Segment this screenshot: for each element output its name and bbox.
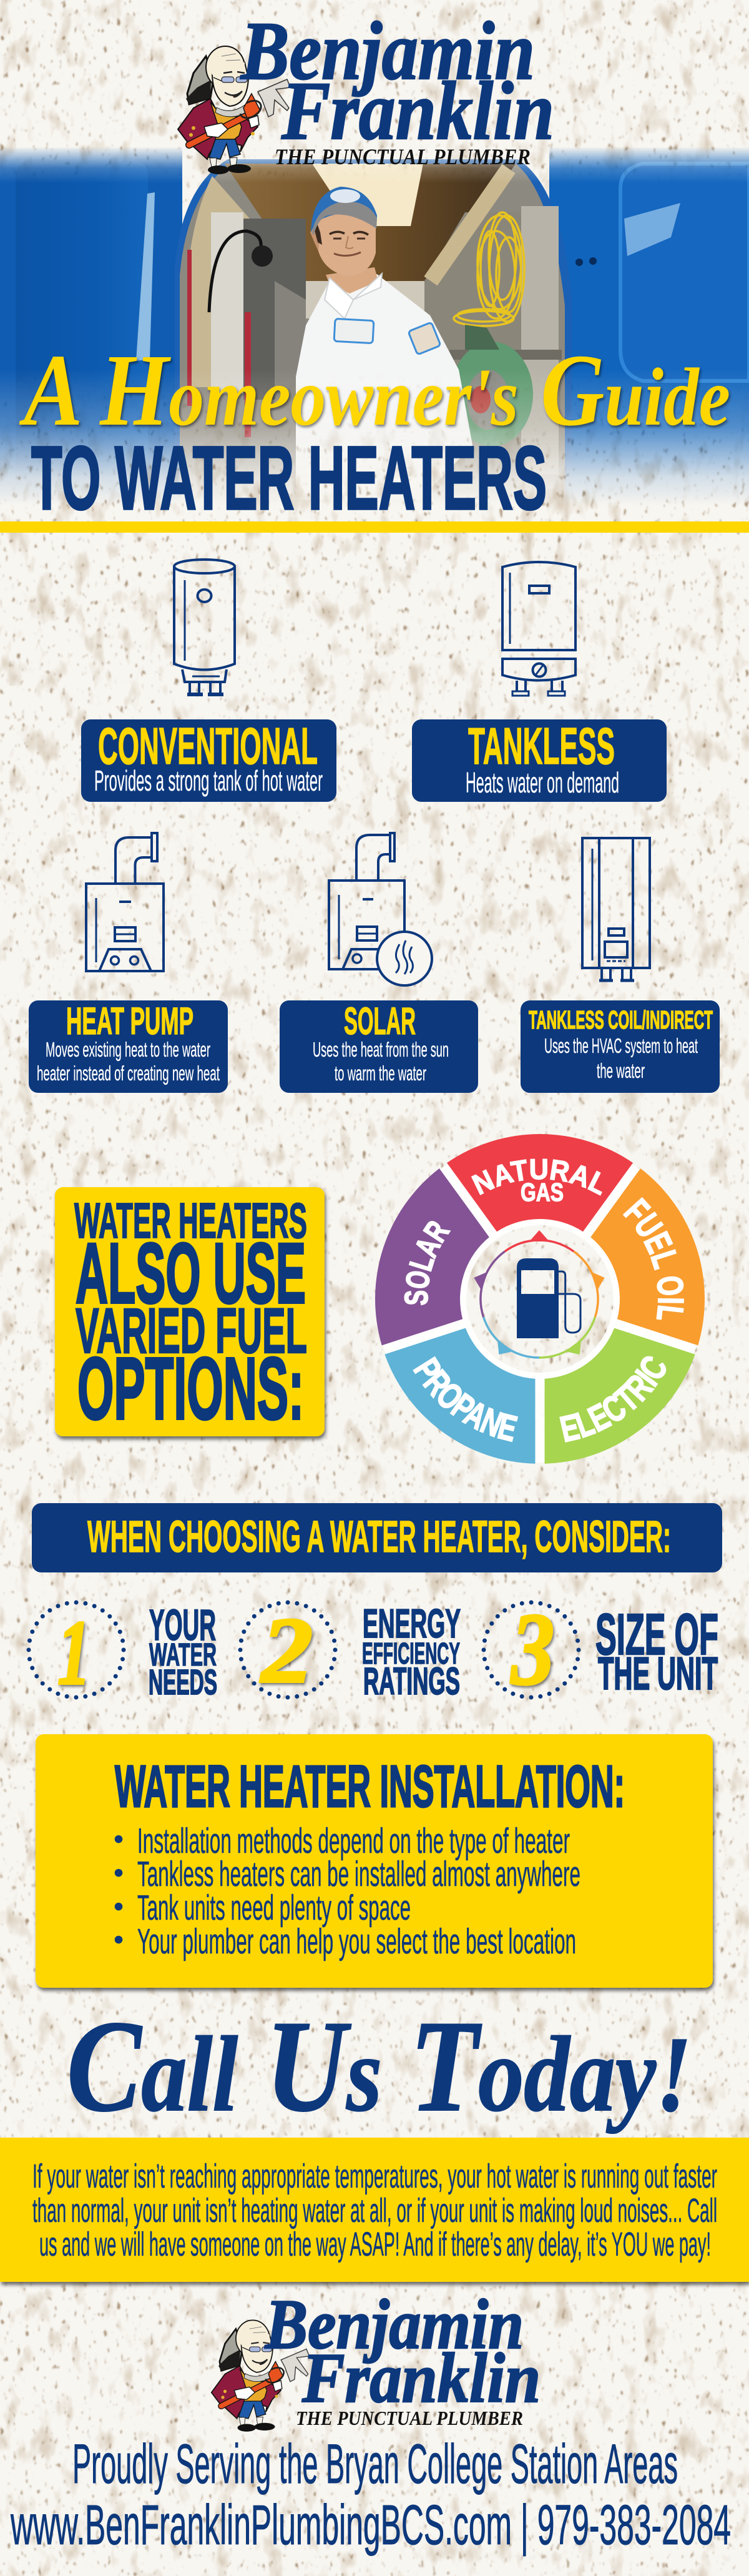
panel: tankless — [412, 717, 667, 802]
segment: electric — [504, 1299, 712, 1487]
factor 2: energy efficiency ratings — [240, 1599, 461, 1702]
label: electric — [439, 1235, 745, 1507]
label: solar — [373, 1152, 554, 1399]
label: propane — [335, 1235, 640, 1507]
icon: solar unit — [329, 833, 432, 985]
bullet list — [115, 1821, 580, 1962]
tagline: THE PUNCTUAL PLUMBER — [275, 144, 531, 169]
brand name: Benjamin — [264, 2286, 524, 2364]
label: RATINGS — [363, 1660, 460, 1702]
label: fuel oil — [524, 1141, 720, 1404]
label: EFFICIENCY — [362, 1637, 460, 1670]
heading: HEAT PUMP — [66, 1000, 193, 1042]
brand name: Benjamin — [240, 4, 535, 97]
description: Uses the heat from the sun — [313, 1038, 449, 1061]
number: 1 — [57, 1602, 91, 1704]
dotted circle — [29, 1602, 124, 1697]
hero photo: plumber in van — [0, 144, 749, 512]
icon: tankless unit — [502, 562, 575, 696]
segment: solar — [355, 1160, 505, 1366]
icon: heat pump — [86, 833, 164, 971]
label: natural: NATURAL — [471, 1159, 602, 1196]
chart: fuel options wheel — [375, 1134, 705, 1464]
dotted circle — [240, 1602, 335, 1697]
label: YOUR — [149, 1601, 216, 1649]
sun heat badge — [377, 932, 432, 985]
title — [19, 333, 730, 528]
label: NEEDS — [149, 1662, 217, 1702]
description line two: heater instead of creating new heat — [37, 1062, 220, 1085]
cap — [311, 187, 377, 232]
mascot — [178, 46, 290, 174]
yellow divider bar — [0, 521, 749, 533]
description: Moves existing heat to the water — [46, 1038, 210, 1061]
heading: SOLAR — [344, 1000, 416, 1042]
bullet list: Tank units need plenty of space — [137, 1888, 411, 1928]
factor 1: your water needs — [29, 1601, 217, 1704]
icon: conventional tank — [174, 560, 235, 694]
line one: WATER HEATERS — [74, 1193, 307, 1248]
line two: ALSO USE — [76, 1226, 306, 1321]
tagline: THE PUNCTUAL PLUMBER — [296, 2407, 523, 2429]
label: WATER — [149, 1637, 217, 1672]
number: 2 — [260, 1599, 313, 1702]
banner: when choosing a water heater — [32, 1503, 722, 1572]
panel: tankless coil/indirect — [521, 1000, 720, 1093]
yellow band: call to action text — [0, 2138, 749, 2282]
brand name second line: Franklin — [281, 64, 554, 157]
logo: Benjamin Franklin The Punctual Plumber — [178, 4, 554, 174]
panel: water heater installation — [36, 1734, 713, 1988]
heading: TANKLESS — [468, 717, 615, 775]
factor 3: size of the unit — [484, 1592, 718, 1706]
panel: solar — [280, 1000, 478, 1093]
van interior — [180, 164, 565, 512]
label: ENERGY — [363, 1601, 461, 1646]
label: natural — [471, 1159, 602, 1196]
icon: fuel pump — [517, 1258, 580, 1338]
segment: fuel oil — [575, 1160, 725, 1366]
face — [318, 215, 376, 274]
label — [595, 1602, 718, 1699]
label — [362, 1601, 461, 1702]
callout: varied fuel options — [55, 1187, 325, 1438]
label — [149, 1601, 217, 1702]
door opening — [175, 159, 572, 405]
cable reel — [451, 325, 533, 447]
center ring with pointers — [471, 1230, 608, 1360]
label: electric: ELECTRIC — [559, 1356, 667, 1443]
footer logo — [212, 2286, 541, 2432]
label: propane: PROPANE — [413, 1356, 518, 1443]
description line two: the water — [597, 1059, 645, 1082]
heading: call us today: Call Us Today! — [67, 1994, 692, 2139]
mascot — [212, 2320, 309, 2432]
yellow extension cord coil — [454, 212, 524, 326]
left van door — [0, 144, 182, 512]
label: fuel oil: FUEL OIL — [623, 1197, 684, 1320]
right van door — [549, 144, 749, 512]
brand name second line: Franklin — [301, 2339, 541, 2417]
heading: CONVENTIONAL — [98, 717, 318, 775]
number: 3 — [510, 1592, 554, 1706]
panel: conventional — [81, 717, 336, 802]
label: solar: SOLAR — [404, 1221, 451, 1305]
segment: propane — [368, 1299, 575, 1487]
script title line: A Homeowner's Guide — [19, 333, 730, 447]
line four: OPTIONS: — [77, 1339, 304, 1438]
icon: tankless coil — [582, 838, 650, 980]
plumber — [296, 187, 472, 500]
segment: natural gas — [447, 1134, 633, 1231]
description line two: to warm the water — [335, 1062, 426, 1085]
panel: heat pump — [29, 1000, 228, 1093]
label: gas: GAS — [521, 1178, 564, 1207]
dotted circle — [484, 1602, 579, 1697]
description: Provides a strong tank of hot water — [94, 764, 323, 797]
line three: VARIED FUEL — [76, 1295, 307, 1366]
